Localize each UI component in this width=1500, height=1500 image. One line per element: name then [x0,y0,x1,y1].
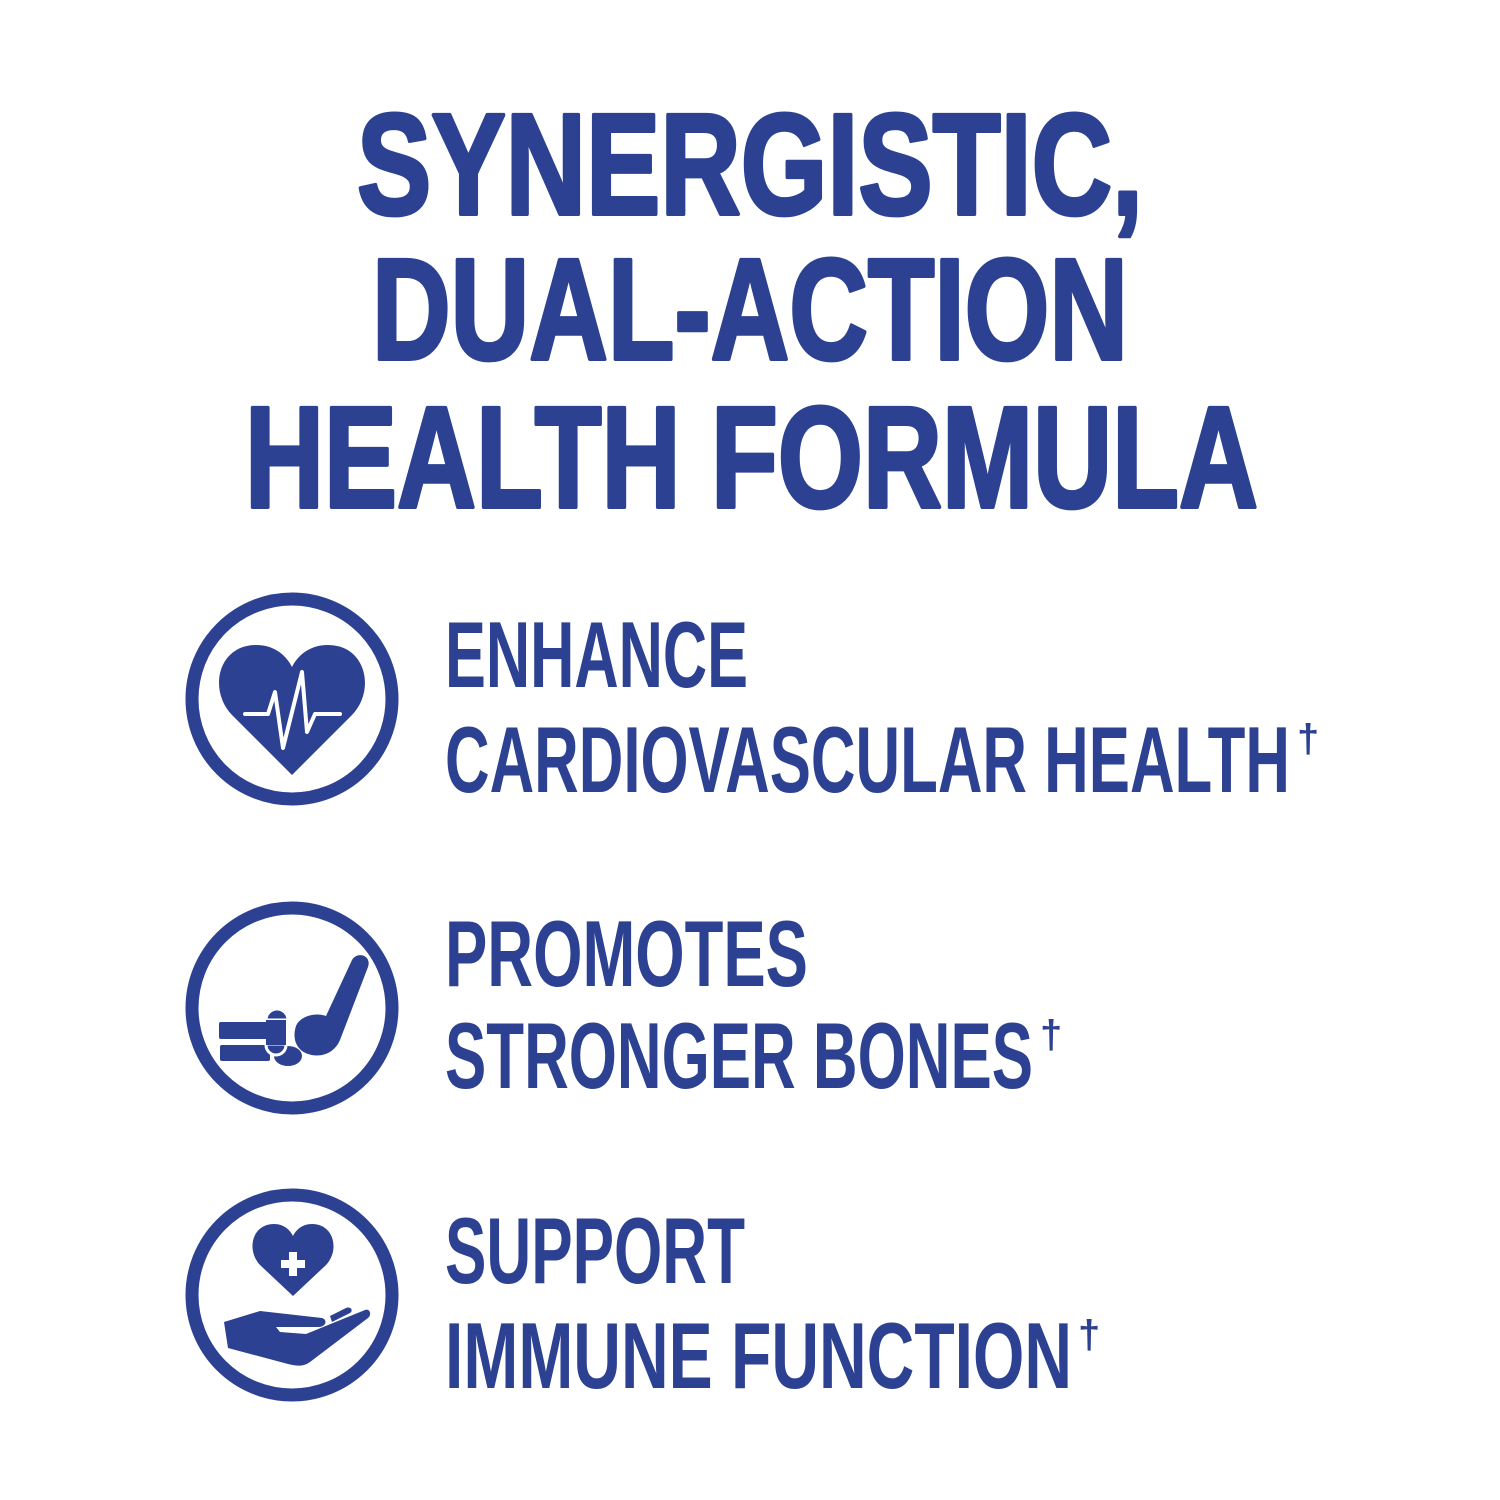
text: immune: † [1078,1313,1100,1357]
text: immune: SUPPORT [445,1198,745,1303]
text: bones: † [1040,1013,1062,1057]
icon: bone joint [192,908,392,1108]
text: bones: PROMOTES [445,901,808,1006]
text: bones: STRONGER BONES [445,1003,1033,1108]
title: DUAL-ACTION [372,229,1128,390]
text: cardiovascular [445,602,1319,812]
text: cardiovascular: ENHANCE [445,602,748,707]
title: SYNERGISTIC, [357,84,1143,245]
icon: heart with pulse [192,599,392,799]
text: immune [445,1198,1100,1408]
text: immune: IMMUNE FUNCTION [445,1303,1072,1408]
text: bones [445,901,1062,1108]
text: cardiovascular: † [1297,717,1319,761]
title [245,84,1258,538]
icon: hand with heart [192,1195,392,1395]
